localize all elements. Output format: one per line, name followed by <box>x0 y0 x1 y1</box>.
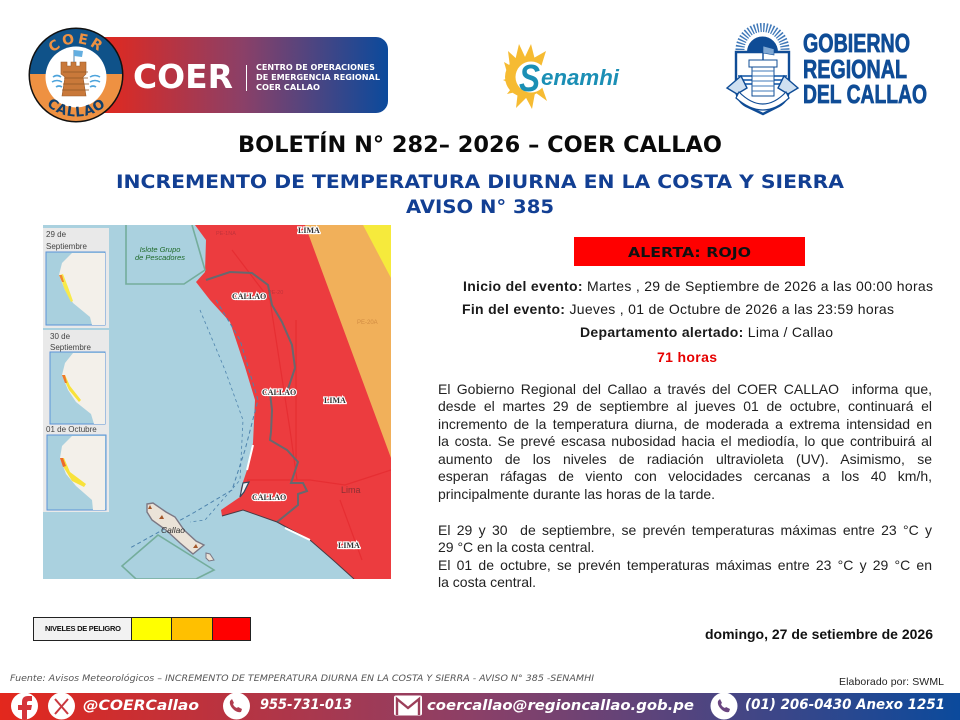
map <box>43 225 391 579</box>
map labels: CALLAO <box>252 493 286 502</box>
inset: 01 de Octubre: 01 de Octubre <box>46 425 97 434</box>
wordmark: GOBIERNO <box>803 28 910 58</box>
icon: phone <box>710 692 738 720</box>
emblem: COER circle: COER <box>49 33 102 51</box>
protected area: south <box>122 535 214 579</box>
body paragraph 1: El Gobierno Regional del Callao a través del COER CALLAO informa que, <box>438 380 932 396</box>
credit: Elaborado por: SWML <box>839 676 944 688</box>
source: Fuente: Avisos Meteorológicos – INCREMENTO DE TEMPERATURA DIURNA EN LA COSTA Y SIERRA - AVISO N° 385 -SENAMHI <box>10 673 595 684</box>
alert badge <box>574 237 805 266</box>
inset: 29 de Septiembre <box>43 228 109 328</box>
subtitle: INCREMENTO DE TEMPERATURA DIURNA EN LA COSTA Y SIERRA <box>116 172 845 193</box>
map: PE-1NA <box>216 231 236 237</box>
icon: shield <box>727 28 798 114</box>
map labels <box>232 226 360 550</box>
alert badge: ALERTA: ROJO <box>628 246 751 261</box>
body paragraph 1: aumento de los niveles de radiación ultravioleta (UV). Asimismo, se <box>438 451 932 467</box>
Callao port <box>240 482 249 497</box>
map labels: CALLAO <box>262 388 296 397</box>
banner: COER: COER <box>133 57 233 96</box>
icon: mail <box>394 696 422 716</box>
logo: Senamhi <box>503 44 620 109</box>
maritime dashed lines <box>130 300 258 548</box>
inset: 29 de Septiembre: 29 de <box>46 230 67 239</box>
map: PE-20 <box>268 290 283 296</box>
logo: Senamhi: enamhi <box>541 65 620 90</box>
island: San Lorenzo: Callao <box>161 525 185 535</box>
map: PE-20A <box>357 320 378 326</box>
date: domingo, 27 de setiembre de 2026 <box>705 626 933 642</box>
event details: Departamento alertado: Lima / Callao <box>580 324 833 340</box>
subtitle: AVISO N° 385 <box>406 197 554 218</box>
banner: COER: CENTRO DE OPERACIONES <box>256 63 375 72</box>
footer band <box>0 692 960 720</box>
protected area: Grupo de Pescadores: de Pescadores <box>135 253 185 262</box>
footer band: coercallao@regioncallao.gob.pe <box>427 698 694 714</box>
south coast outline <box>222 510 354 579</box>
emblem: COER circle: CALLAO <box>48 99 104 117</box>
footer band: (01) 206-0430 Anexo 1251 <box>745 697 945 713</box>
inset: 30 de Septiembre <box>43 330 109 425</box>
inset: 01 de Octubre <box>43 425 109 512</box>
title: BOLETÍN N° 282– 2026 – COER CALLAO <box>238 132 722 158</box>
hazard legend: NIVELES DE PELIGRO <box>45 624 121 633</box>
banner: COER: DE EMERGENCIA REGIONAL <box>256 73 380 82</box>
event details: Inicio del evento: Martes , 29 de Septiembre de 2026 a las 00:00 horas <box>463 278 933 294</box>
icon: sun <box>503 44 547 109</box>
hazard zone: orange <box>302 225 391 460</box>
protected area: Grupo de Pescadores <box>126 225 205 284</box>
body paragraph 1: incremento de la temperatura diurna, de moderada a extrema intensidad en <box>438 416 932 432</box>
white shoreline <box>247 445 310 540</box>
icon: phone <box>223 692 250 720</box>
event details: 71 horas <box>657 349 717 365</box>
map labels: CALLAO <box>232 292 266 301</box>
inset: 30 de Septiembre: 30 de <box>50 332 71 341</box>
island: San Lorenzo <box>147 503 214 561</box>
banner: COER: COER CALLAO <box>256 83 321 92</box>
body paragraph 1 <box>438 380 932 502</box>
body paragraph 2: la costa central. <box>438 574 536 590</box>
inset: 29 de Septiembre: Septiembre <box>46 242 87 251</box>
body paragraph 2: El 01 de octubre, se prevén temperaturas máximas entre 23 °C y 29 °C en <box>438 557 932 573</box>
hazard zone: red <box>195 225 391 579</box>
icon: X <box>48 692 75 720</box>
subtitle <box>116 172 845 218</box>
event details: Fin del evento: Jueves , 01 de Octubre de 2026 a las 23:59 horas <box>462 301 894 317</box>
map labels: LIMA <box>324 396 346 405</box>
icon: facebook <box>11 692 38 720</box>
hazard zone: yellow <box>363 225 391 278</box>
event details <box>462 278 933 365</box>
body paragraph 1: esperan ráfagas de viento con velocidades cercanas a los 40 km/h, <box>438 468 932 484</box>
banner: COER <box>100 37 388 113</box>
logo: Gobierno Regional del Callao <box>727 28 927 114</box>
footer band: 955-731-013 <box>260 697 352 713</box>
body paragraph 1: principalmente durante las horas de la tarde. <box>438 486 715 502</box>
logo: Senamhi: S <box>519 58 540 100</box>
body paragraph 1: desde el martes 29 de septiembre al jueves 01 de octubre, continuará el <box>438 398 932 414</box>
roads <box>232 250 391 560</box>
protected area: Grupo de Pescadores: Islote Grupo <box>140 245 180 254</box>
body paragraph 1: la costa. Se prevé escasa nubosidad hacia el mediodía, lo que contribuirá al <box>438 433 932 449</box>
body paragraph 2: 29 °C en la costa central. <box>438 539 595 555</box>
inset: 30 de Septiembre: Septiembre <box>50 343 91 352</box>
map labels: LIMA <box>298 226 320 235</box>
map labels: LIMA <box>338 541 360 550</box>
body paragraph 2 <box>438 522 932 590</box>
emblem: COER circle <box>28 28 124 122</box>
hazard legend <box>34 618 250 640</box>
Callao boundary <box>206 272 307 522</box>
wordmark: REGIONAL <box>803 54 907 84</box>
map: Lima <box>341 485 361 495</box>
wordmark <box>803 28 927 109</box>
footer band: @COERCallao <box>83 698 199 714</box>
logo: COER Callao <box>28 28 388 122</box>
body paragraph 2: El 29 y 30 de septiembre, se prevén temperaturas máximas entre 23 °C y <box>438 522 932 538</box>
